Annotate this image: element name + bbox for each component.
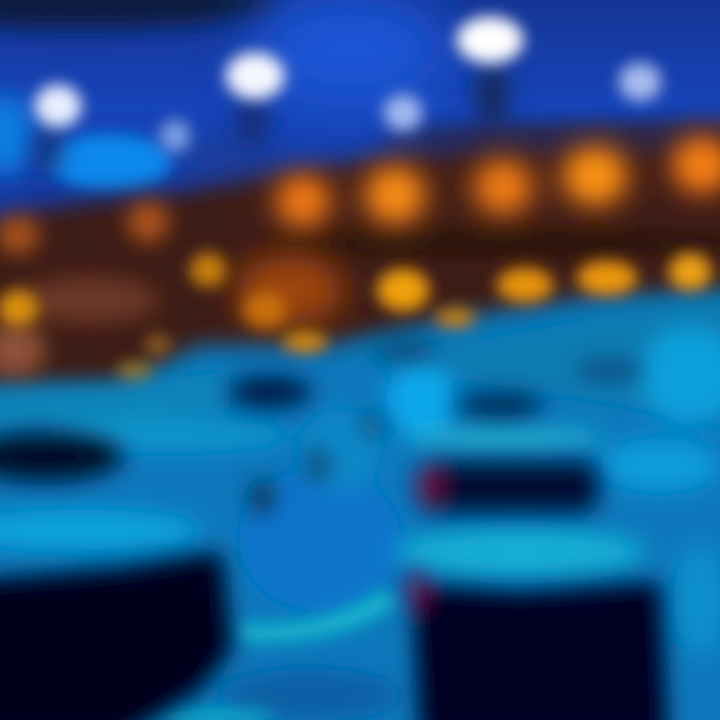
lamp posts: [35, 63, 509, 174]
dark hull shadows: [0, 340, 668, 720]
yellow lower lights: [0, 253, 711, 382]
brown quay band: [0, 122, 720, 385]
orange upper lights halo: [273, 135, 720, 229]
water streaks: [0, 295, 720, 720]
sky: [0, 0, 720, 240]
bright cyan arcs: [155, 588, 398, 720]
white lights: [35, 17, 661, 152]
orange upper lights: [0, 143, 720, 253]
